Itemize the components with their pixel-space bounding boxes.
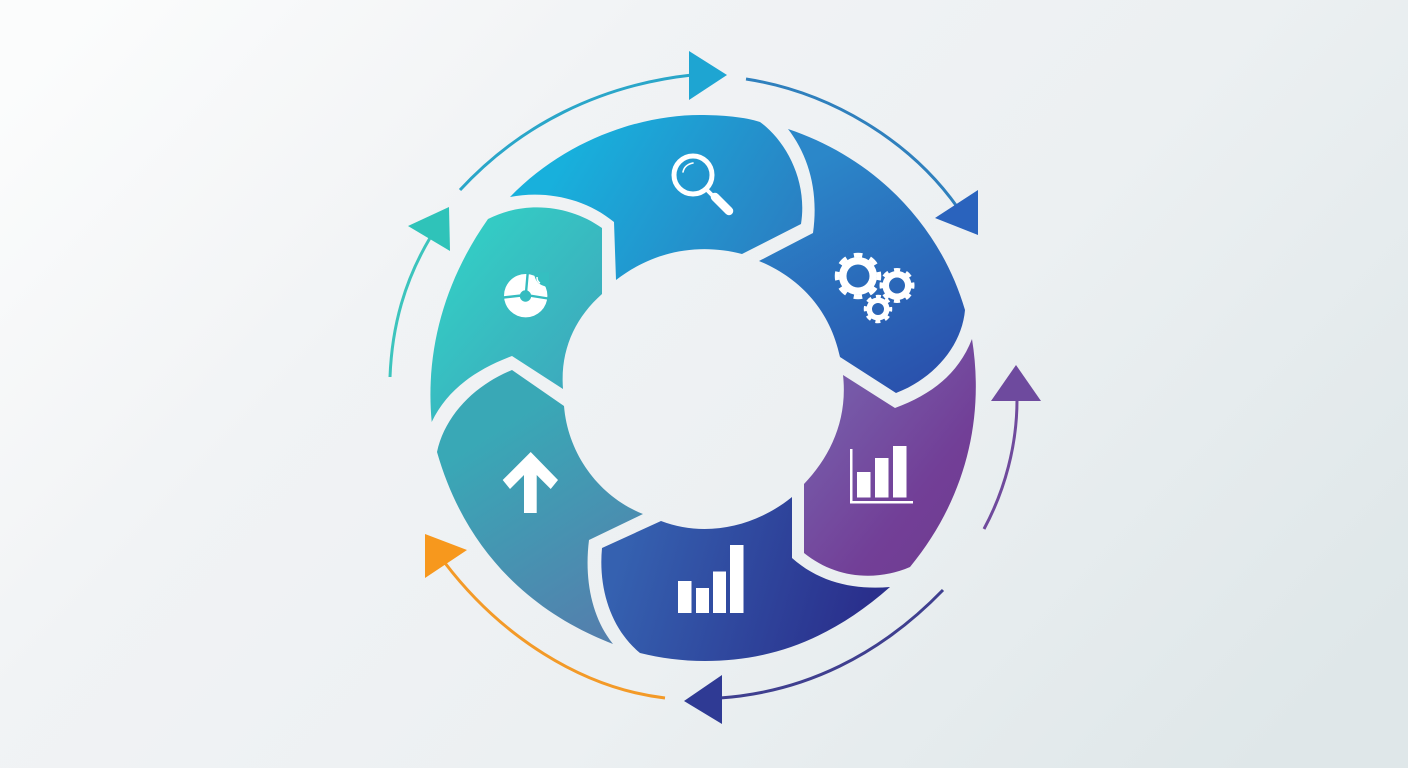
arrow: orange, bottom to lower left bbox=[425, 534, 665, 698]
arrow: navy, bottom right to bottom bbox=[684, 590, 943, 724]
arrow: purple, right going up bbox=[984, 365, 1041, 529]
icon: pie chart bbox=[504, 272, 549, 317]
panel: overview segment (teal, upper left) bbox=[430, 207, 602, 422]
icon: up arrow bbox=[503, 452, 558, 513]
icon: bar chart with axes bbox=[850, 446, 913, 504]
icon: ascending bars bbox=[678, 545, 744, 613]
arrow: teal, left going up bbox=[390, 207, 450, 377]
panel: results segment (navy, bottom) bbox=[601, 497, 890, 661]
panel: growth segment (teal-blue, lower left) bbox=[437, 370, 643, 644]
panel: analysis segment (purple, lower right) bbox=[804, 339, 976, 576]
icon: magnifying glass bbox=[674, 156, 729, 211]
cycle diagram bbox=[430, 115, 976, 661]
arrow: cyan, top left to top bbox=[460, 51, 727, 190]
panel: discovery segment (cyan, top) bbox=[510, 115, 802, 280]
icon: three gears bbox=[837, 255, 912, 322]
panel: process segment (blue, upper right) bbox=[759, 129, 965, 393]
arrow: blue, top to right bbox=[746, 79, 978, 235]
